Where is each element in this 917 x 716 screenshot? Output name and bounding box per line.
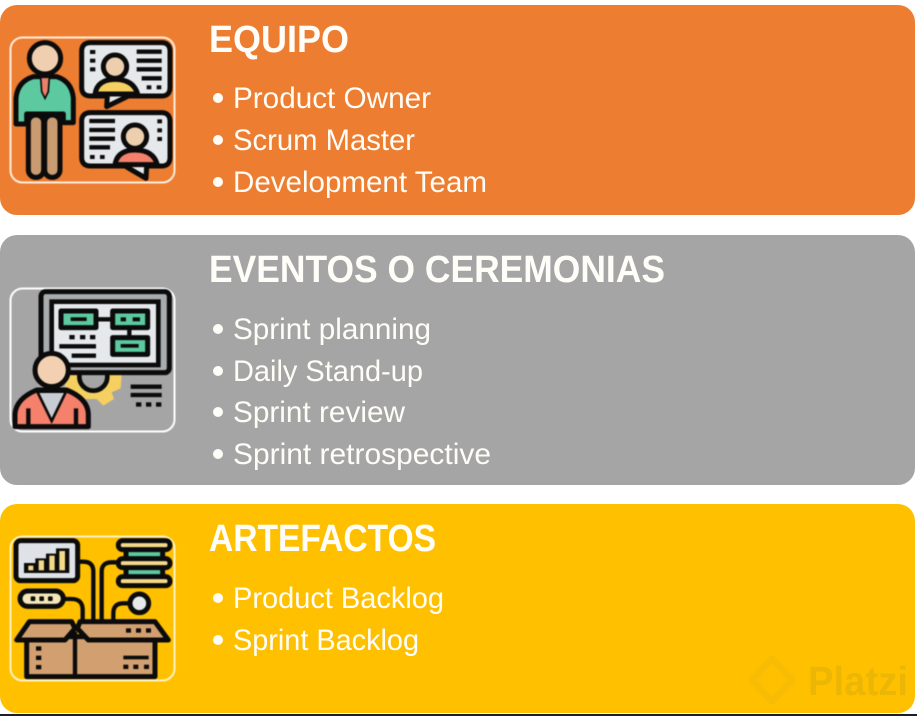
list: scrum events: Sprint review <box>233 396 405 429</box>
panel: artefactos <box>0 504 915 713</box>
icon: open box with artifacts <box>10 536 174 680</box>
icon: presenter with screen and gear <box>10 288 174 432</box>
list: scrum events: Sprint planning <box>233 313 431 346</box>
list: scrum events: Daily Stand-up <box>233 355 423 388</box>
panel: eventos o ceremonias <box>0 235 915 485</box>
list: team roles: Scrum Master <box>233 124 415 157</box>
list: scrum artifacts: Product Backlog <box>233 582 444 615</box>
list: scrum events <box>213 313 491 471</box>
watermark: platzi logo <box>752 658 908 704</box>
heading: eventos o ceremonias: EVENTOS O CEREMONIAS <box>209 249 665 291</box>
list: scrum artifacts: Sprint Backlog <box>233 624 419 657</box>
heading: equipo: EQUIPO <box>209 19 349 61</box>
list: team roles <box>213 82 487 199</box>
icon: team members with speech bubbles <box>10 38 174 182</box>
list: team roles: Development Team <box>233 166 487 199</box>
list: team roles: Product Owner <box>233 82 431 115</box>
list: scrum events: Sprint retrospective <box>233 438 491 471</box>
list: scrum artifacts <box>213 582 444 657</box>
heading: artefactos: ARTEFACTOS <box>209 518 436 560</box>
watermark: platzi logo: Platzi <box>808 658 908 704</box>
panel: equipo <box>0 5 915 215</box>
